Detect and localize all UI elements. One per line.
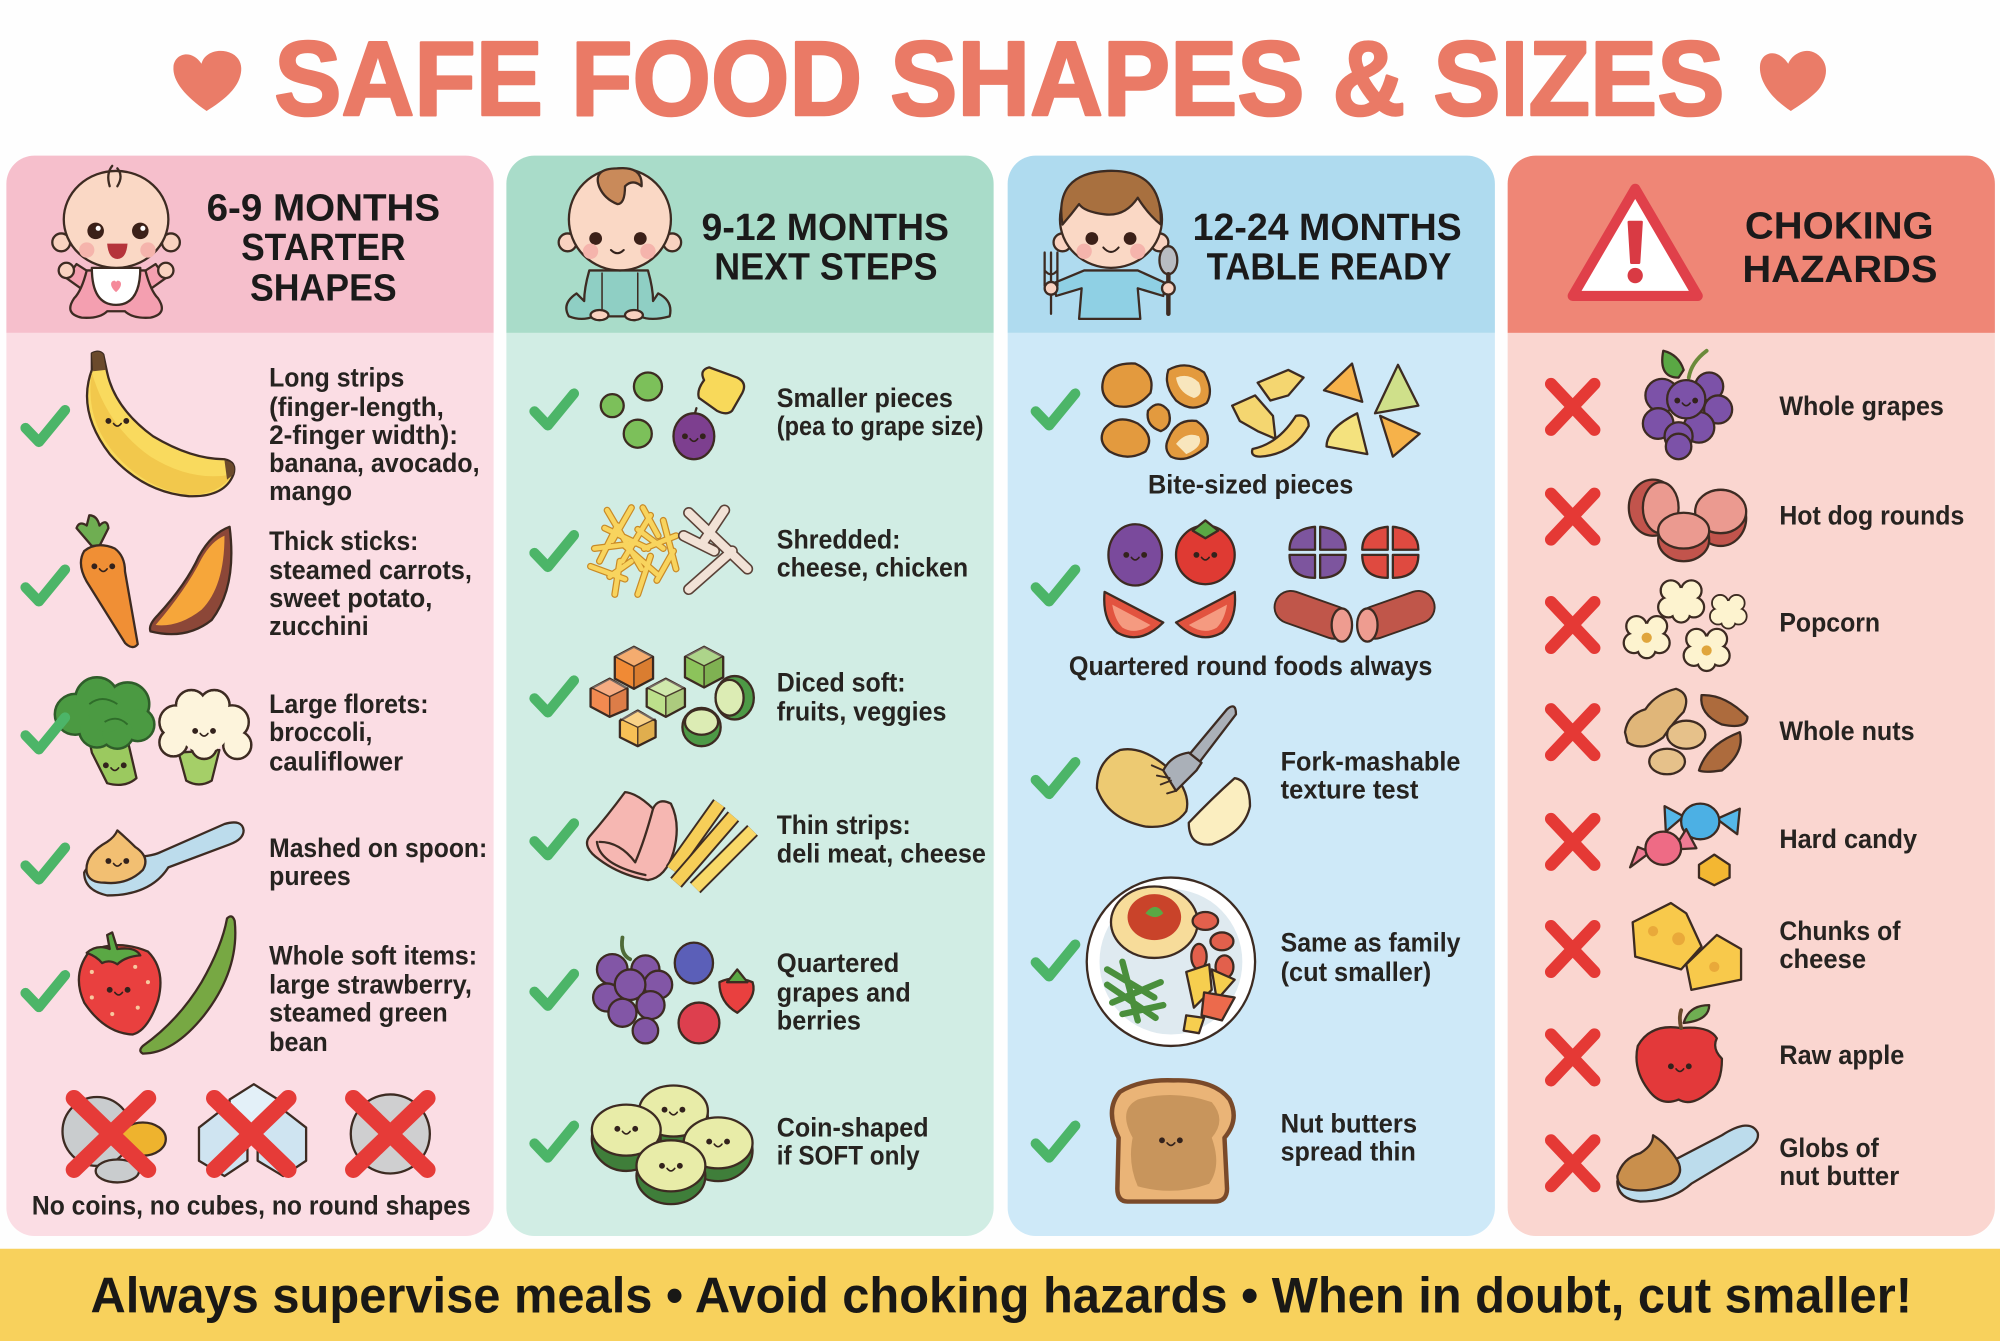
row: strawberry and green bean: bean xyxy=(269,1027,328,1057)
row: spoon puree xyxy=(26,822,487,895)
toddler face xyxy=(1077,232,1145,259)
row: shredded: cheese, chicken xyxy=(777,553,968,583)
icon: happy baby xyxy=(52,166,180,318)
row: diced: fruits, veggies xyxy=(777,697,946,727)
row: coin-shaped soft: Coin-shaped xyxy=(777,1113,929,1143)
row: banana xyxy=(26,352,480,506)
row: globs of nut butter: Globs of xyxy=(1779,1133,1879,1163)
row: popcorn: Popcorn xyxy=(1779,607,1880,637)
heading xyxy=(702,206,949,287)
heading: SHAPES xyxy=(250,266,397,308)
row: fork-mashable: Fork-mashable xyxy=(1281,746,1460,776)
row: broccoli and cauliflower xyxy=(26,677,429,785)
row: diced xyxy=(534,647,946,746)
row: quartered grapes and berries: grapes and xyxy=(777,977,911,1007)
row: broccoli and cauliflower: cauliflower xyxy=(269,746,404,776)
baby face xyxy=(79,223,156,259)
panel header band xyxy=(1508,156,1995,333)
icon: warning triangle xyxy=(1573,189,1698,296)
icon: sitting baby xyxy=(559,168,681,320)
row: quartered round foods xyxy=(1036,520,1432,681)
row: banana: Long strips xyxy=(269,363,404,393)
heading: 6-9 MONTHS xyxy=(207,187,440,229)
row: whole nuts: Whole nuts xyxy=(1779,716,1915,746)
row: spoon puree: purees xyxy=(269,861,351,891)
row: chunks of cheese: Chunks of xyxy=(1779,916,1901,946)
row: carrot and sweet potato: Thick sticks: xyxy=(269,526,418,556)
row: quartered grapes and berries xyxy=(534,938,911,1043)
baby face xyxy=(583,232,656,259)
row: quartered grapes and berries: Quartered xyxy=(777,948,899,978)
panel: choking hazards xyxy=(1508,156,1995,1236)
heading: NEXT STEPS xyxy=(714,245,938,287)
row: strawberry and green bean: large strawberry, xyxy=(269,970,472,1000)
panel body xyxy=(6,333,494,1236)
row: strawberry and green bean: Whole soft items: xyxy=(269,940,477,970)
row: chunks of cheese xyxy=(1551,903,1901,990)
row: popcorn xyxy=(1551,580,1880,671)
row: nut butter toast: Nut butters xyxy=(1281,1109,1417,1139)
row: carrot and sweet potato: sweet potato, xyxy=(269,583,432,613)
row: raw apple: Raw apple xyxy=(1779,1040,1904,1070)
panel: 9-12 months xyxy=(506,156,994,1236)
row: shredded xyxy=(534,508,968,594)
heading: 12-24 MONTHS xyxy=(1193,206,1462,248)
row: broccoli and cauliflower: Large florets: xyxy=(269,689,429,719)
heading xyxy=(1742,205,1938,290)
row: banana: (finger-length, xyxy=(269,392,444,422)
row: carrot and sweet potato: zucchini xyxy=(269,611,369,641)
row: whole grapes: Whole grapes xyxy=(1779,391,1944,421)
panel header band xyxy=(6,156,494,333)
row: coin-shaped soft: if SOFT only xyxy=(777,1141,920,1171)
row: whole grapes xyxy=(1551,351,1944,459)
row: bite-sized pieces xyxy=(1036,363,1420,500)
row: globs of nut butter: nut butter xyxy=(1779,1161,1900,1191)
row: same as family plate: (cut smaller) xyxy=(1281,957,1431,987)
row: strawberry and green bean: steamed green xyxy=(269,998,448,1028)
row: banana: mango xyxy=(269,476,352,506)
row: smaller pieces: (pea to grape size) xyxy=(777,411,983,441)
heading: TABLE READY xyxy=(1207,245,1452,287)
row: quartered round foods: Quartered round foods always xyxy=(1069,651,1432,681)
icon: cubes crossed out xyxy=(199,1084,306,1176)
row: globs of nut butter xyxy=(1551,1126,1900,1202)
panel body xyxy=(1008,333,1495,1236)
row: quartered grapes and berries: berries xyxy=(777,1005,861,1035)
row: hot dog rounds: Hot dog rounds xyxy=(1779,500,1964,530)
banner background xyxy=(0,1249,2000,1341)
row: nut butter toast: spread thin xyxy=(1281,1137,1416,1167)
row: chunks of cheese: cheese xyxy=(1779,944,1866,974)
row: thin strips: Thin strips: xyxy=(777,810,911,840)
panel body xyxy=(1508,333,1995,1236)
heading: STARTER xyxy=(241,226,406,268)
banner text: Always supervise meals • Avoid choking hazards • When in doubt, cut smaller! xyxy=(91,1268,1912,1324)
row: thin strips xyxy=(534,792,986,888)
row: broccoli and cauliflower: broccoli, xyxy=(269,717,372,747)
heading: HAZARDS xyxy=(1742,248,1938,290)
heading: CHOKING xyxy=(1745,205,1934,247)
row: same as family plate xyxy=(1036,878,1461,1046)
row: banana: 2-finger width): xyxy=(269,420,458,450)
row: fork-mashable xyxy=(1036,706,1460,845)
row: shredded: Shredded: xyxy=(777,524,901,554)
icon: heart left xyxy=(173,51,241,111)
row: strawberry and green bean xyxy=(26,916,477,1057)
row: hot dog rounds xyxy=(1551,480,1964,561)
row: smaller pieces: Smaller pieces xyxy=(777,383,953,413)
row: whole nuts xyxy=(1551,689,1915,774)
row: thin strips: deli meat, cheese xyxy=(777,838,986,868)
heading xyxy=(1193,206,1462,287)
footer banner xyxy=(0,1249,2000,1341)
row: bite-sized pieces: Bite-sized pieces xyxy=(1148,470,1353,500)
row: carrot and sweet potato xyxy=(26,515,472,647)
row: spoon puree: Mashed on spoon: xyxy=(269,833,487,863)
row: hard candy xyxy=(1551,804,1917,885)
warning: no coins, cubes or round shapes xyxy=(32,1084,471,1220)
row: raw apple xyxy=(1551,1005,1904,1102)
row: diced: Diced soft: xyxy=(777,667,906,697)
panel body xyxy=(506,333,994,1236)
caption: No coins, no cubes, no round shapes xyxy=(32,1190,471,1220)
panel: 6-9 months xyxy=(6,156,494,1236)
row: carrot and sweet potato: steamed carrots, xyxy=(269,555,472,585)
heading: 9-12 MONTHS xyxy=(702,206,949,248)
row: nut butter toast xyxy=(1036,1080,1417,1202)
row: banana: banana, avocado, xyxy=(269,448,480,478)
row: hard candy: Hard candy xyxy=(1779,824,1917,854)
row: smaller pieces xyxy=(534,367,983,459)
icon: coins crossed out xyxy=(62,1097,166,1182)
icon: round shape crossed out xyxy=(351,1094,430,1173)
panel header band xyxy=(1008,156,1495,333)
row: coin-shaped soft xyxy=(534,1085,929,1204)
icon: heart right xyxy=(1760,51,1826,111)
heading xyxy=(207,187,440,308)
icon: toddler with fork and spoon xyxy=(1045,171,1177,319)
panel header band xyxy=(506,156,994,333)
title xyxy=(173,20,1826,138)
row: fork-mashable: texture test xyxy=(1281,774,1418,804)
title text: SAFE FOOD SHAPES & SIZES xyxy=(274,20,1724,138)
panel: 12-24 months xyxy=(1008,156,1495,1236)
row: same as family plate: Same as family xyxy=(1281,928,1461,958)
